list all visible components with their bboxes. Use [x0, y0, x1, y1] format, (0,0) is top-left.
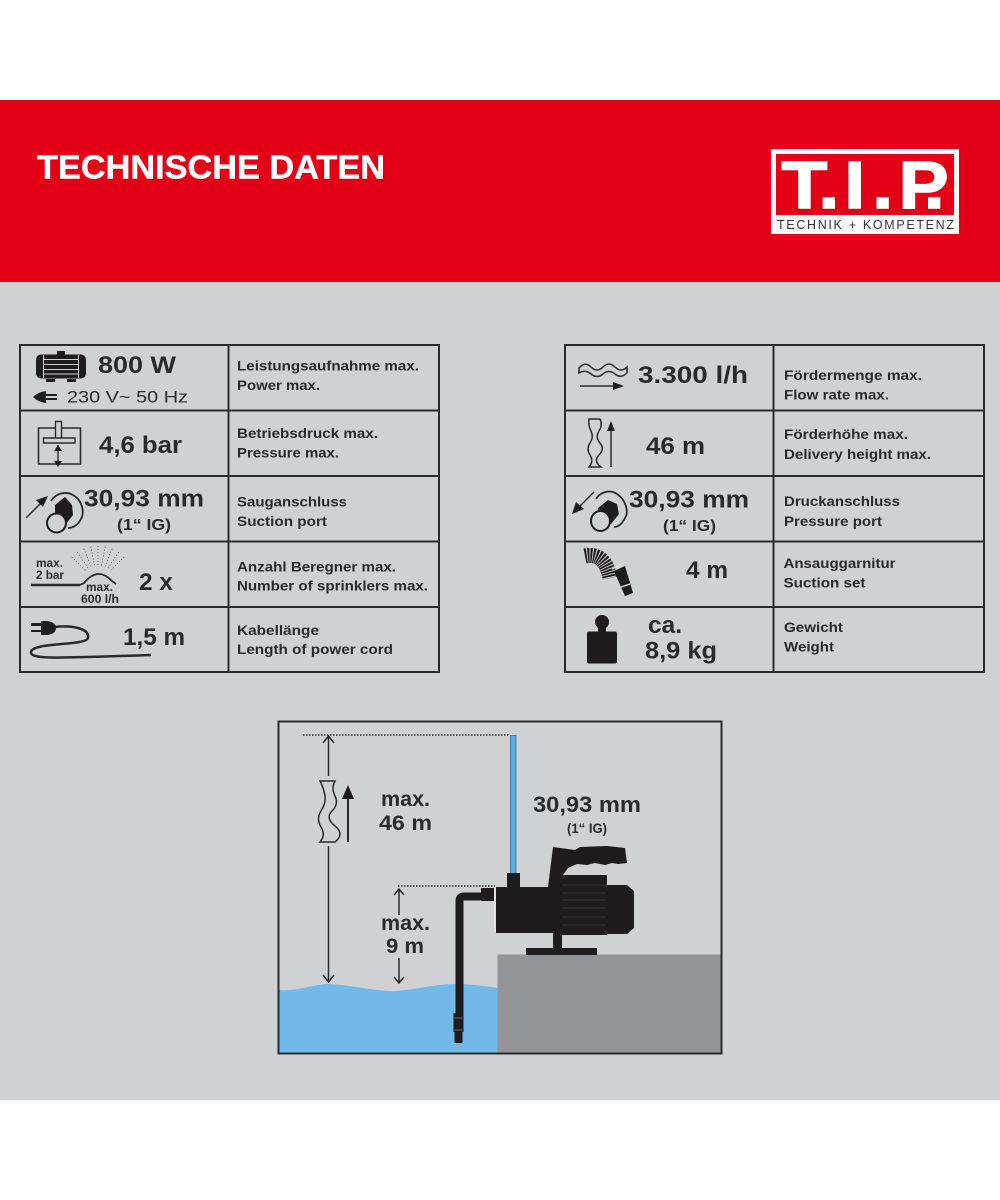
row: flow rate — [579, 362, 922, 402]
icon: sprinkler: 2 bar — [36, 568, 64, 582]
suction pipe — [454, 896, 482, 1043]
row: suction port: 30,93 mm — [84, 486, 204, 512]
row: delivery height: Delivery height max. — [784, 446, 931, 462]
row: suction set: 4 m — [686, 557, 728, 584]
row: sprinklers: Anzahl Beregner max. — [237, 558, 396, 574]
row: power cord: Length of power cord — [237, 641, 393, 657]
delivery height arrows — [318, 736, 354, 982]
row: weight — [587, 612, 843, 664]
row: flow rate: Fördermenge max. — [784, 367, 922, 383]
concrete base — [498, 954, 720, 1053]
blue riser pipe — [510, 736, 516, 874]
suction height arrows — [394, 889, 404, 983]
water — [279, 984, 498, 1053]
row: suction set: Ansauggarnitur — [784, 555, 896, 571]
row: delivery height: 46 m — [646, 433, 705, 460]
row: delivery height — [588, 419, 931, 467]
row: sprinklers: Number of sprinklers max. — [237, 578, 428, 594]
label: max. 9 m: max. — [381, 912, 430, 935]
grey content panel — [0, 282, 1000, 1100]
row: pressure port: Pressure port — [784, 513, 882, 529]
label: max. 9 m — [381, 912, 430, 958]
icon: pressure gauge — [38, 422, 80, 467]
row: suction port: (1“ IG) — [117, 517, 171, 534]
icon: sprinkler: 600 l/h — [81, 594, 119, 606]
row: pressure: Pressure max. — [237, 444, 339, 460]
row: pressure: 4,6 bar — [99, 432, 182, 459]
row: pressure port — [572, 486, 900, 535]
row: pressure: Betriebsdruck max. — [237, 425, 378, 441]
icon: weight — [587, 615, 617, 664]
icon: sprinkler: max. — [86, 580, 113, 594]
red header band — [0, 100, 1000, 282]
panel: right specification table — [565, 345, 984, 672]
row: pressure — [38, 422, 378, 467]
row: pressure port: (1“ IG) — [663, 518, 716, 535]
icon: pressure connection — [572, 492, 627, 531]
delivery height dotted line — [303, 734, 510, 736]
row: weight: 8,9 kg — [645, 638, 717, 664]
panel: pump installation diagram — [278, 722, 722, 1054]
icon: water flow — [579, 364, 627, 390]
pump — [481, 846, 634, 955]
icon: motor — [36, 351, 86, 382]
row: delivery height: Förderhöhe max. — [784, 426, 908, 442]
icon: cord and plug — [31, 621, 151, 658]
row: power: 800 W — [98, 352, 176, 379]
row: suction set — [585, 555, 896, 596]
row: flow rate: Flow rate max. — [784, 386, 889, 402]
row: power: Power max. — [237, 377, 320, 393]
row: weight: Gewicht — [784, 619, 843, 635]
row: sprinklers — [31, 545, 428, 606]
icon: sprinkler: max. — [36, 556, 63, 570]
icon: height arrow — [588, 419, 615, 467]
row: suction port — [26, 486, 347, 534]
label: max. 9 m: 9 m — [386, 935, 424, 958]
label: max. 46 m — [379, 788, 432, 835]
row: power: Leistungsaufnahme max. — [237, 358, 419, 374]
row: flow rate: 3.300 l/h — [638, 362, 748, 389]
row: power: 230 V~ 50 Hz — [67, 388, 188, 406]
row: power cord: 1,5 m — [123, 624, 185, 651]
label: max. 46 m: 46 m — [379, 812, 432, 835]
suction height dotted line — [398, 885, 495, 887]
row: sprinklers: 2 x — [139, 569, 174, 596]
label: max. 46 m: max. — [381, 788, 430, 811]
logo: T.I.P.: TECHNIK + KOMPETENZ — [777, 218, 954, 232]
row: suction port: Sauganschluss — [237, 494, 347, 510]
title: TECHNISCHE DATEN — [37, 148, 385, 186]
icon: plug — [33, 391, 57, 403]
row: suction port: Suction port — [237, 513, 327, 529]
row: weight: Weight — [784, 638, 834, 654]
logo: T.I.P.: T.I.P. — [782, 149, 949, 223]
row: weight: ca. — [648, 612, 682, 639]
row: power — [33, 351, 419, 406]
diagram frame — [278, 722, 722, 1054]
label: 30,93 mm: (1“ IG) — [567, 821, 607, 836]
icon: suction hose — [585, 555, 633, 596]
row: pressure port: 30,93 mm — [629, 486, 749, 514]
icon: suction connection — [26, 493, 83, 532]
label: 30,93 mm — [533, 792, 641, 836]
row: power cord — [31, 621, 393, 658]
row: power cord: Kabellänge — [237, 622, 319, 638]
row: pressure port: Druckanschluss — [784, 493, 900, 509]
label: 30,93 mm: 30,93 mm — [533, 792, 641, 817]
row: suction set: Suction set — [784, 574, 866, 590]
panel: left specification table — [20, 345, 439, 672]
icon: sprinkler — [31, 545, 125, 606]
